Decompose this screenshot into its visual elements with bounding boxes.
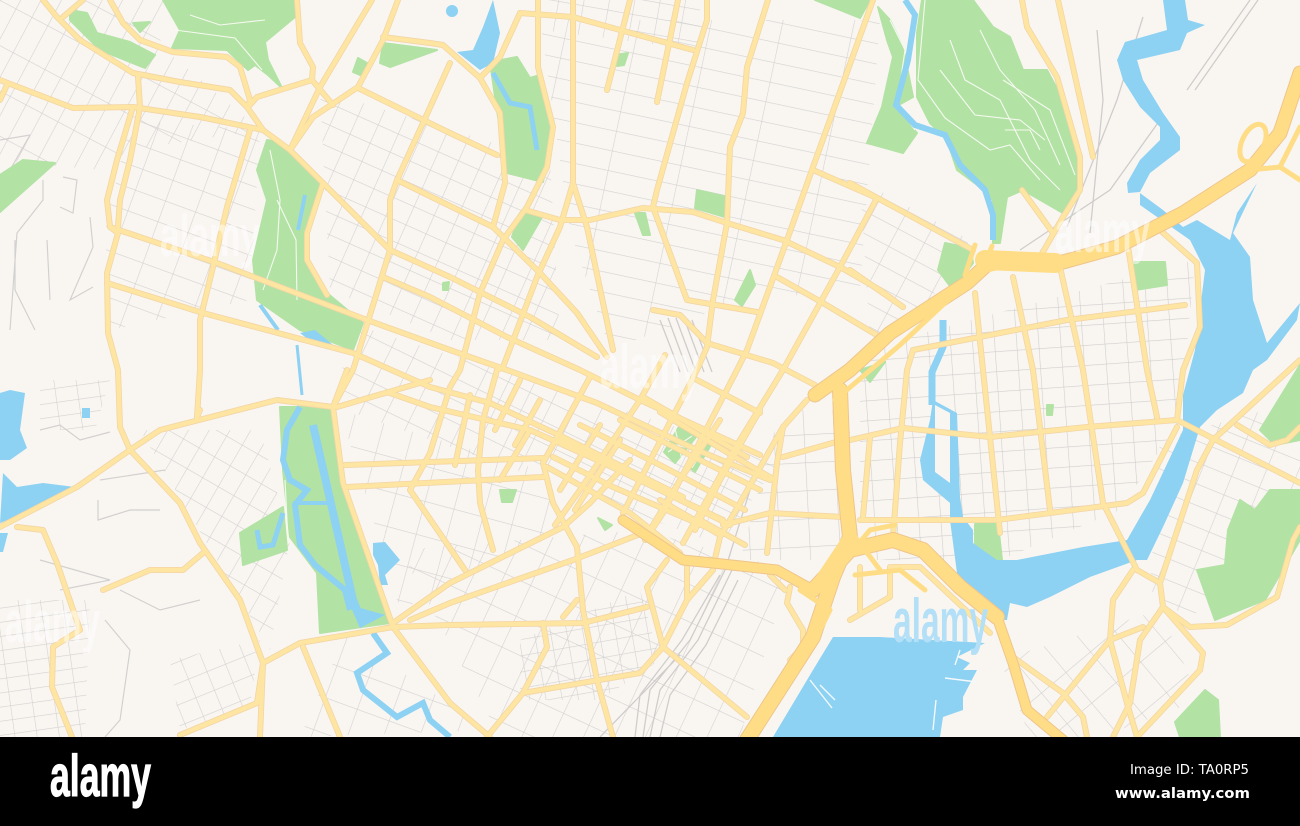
park footpaths xyxy=(175,0,1075,540)
highways and interchanges xyxy=(623,73,1300,740)
park: north-west large xyxy=(163,0,297,88)
ponds: central park xyxy=(300,330,333,347)
park: upper centre xyxy=(490,57,553,182)
watermark on harbour: alamy xyxy=(893,587,988,656)
watermark on land and water: alamy xyxy=(5,590,100,655)
watermark on land and water: alamy xyxy=(600,333,700,402)
river: north xyxy=(896,0,993,240)
park: central squares xyxy=(664,425,696,463)
lakes: west edge xyxy=(0,390,27,460)
bottom black bar xyxy=(0,737,1300,826)
watermark on land and water: alamy xyxy=(160,204,260,269)
park: north-west strip xyxy=(70,10,155,68)
park: north-east large xyxy=(917,0,1080,243)
alamy logo: alamy xyxy=(50,744,151,809)
channel north xyxy=(932,320,943,405)
harbour xyxy=(773,637,985,737)
watermark on land and water: alamy xyxy=(1055,200,1150,265)
harbour piers xyxy=(810,650,977,730)
river: south-west park xyxy=(283,407,350,610)
river: north-east bend xyxy=(1117,0,1205,193)
park: south-west with reservoir xyxy=(280,407,390,633)
park: south-east xyxy=(1197,490,1300,620)
channel island xyxy=(935,405,950,483)
watermark on land and water xyxy=(5,200,1150,655)
image id: Image ID: TA0RP5 xyxy=(1130,763,1249,778)
railway lines xyxy=(600,0,1258,737)
website: www.alamy.com xyxy=(1115,786,1250,802)
curving suburban streets, west side xyxy=(0,135,200,737)
lake: top centre xyxy=(457,0,500,70)
park: long central-west xyxy=(253,140,363,350)
bay and east river xyxy=(920,183,1300,620)
